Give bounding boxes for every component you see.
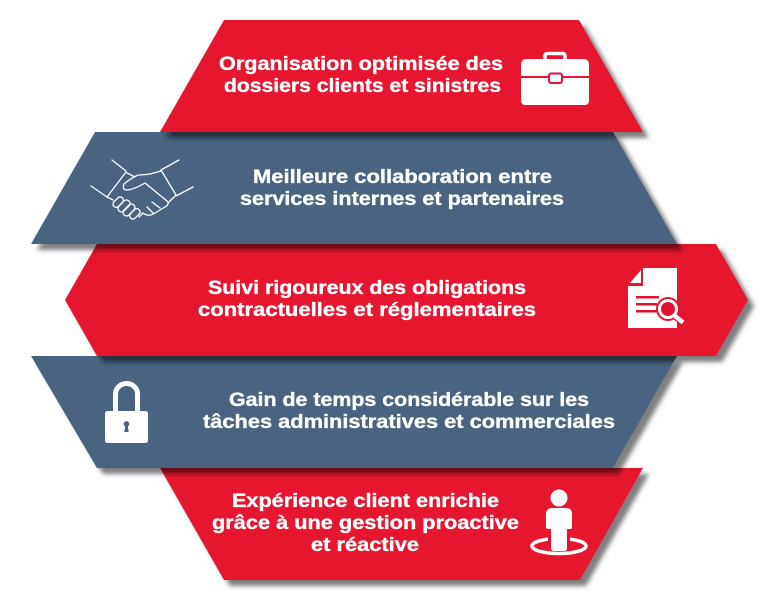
- text: organisation optimisée: Organisation optimisée des: [219, 54, 503, 75]
- text: suivi rigoureux: Suivi rigoureux des obligations: [208, 278, 526, 299]
- text: expérience client: [212, 491, 519, 556]
- text: suivi rigoureux: [198, 278, 536, 321]
- text: meilleure collaboration: [240, 167, 564, 210]
- panel: organisation optimisée: [160, 20, 643, 132]
- icon: person on ring: [532, 490, 586, 554]
- text: gain de temps: Gain de temps considérable sur les: [229, 390, 589, 411]
- text: expérience client: et réactive: [311, 535, 419, 556]
- text: expérience client: grâce à une gestion proactive: [212, 513, 519, 534]
- text: meilleure collaboration: services internes et partenaires: [240, 189, 564, 210]
- panel: suivi rigoureux: [65, 244, 748, 356]
- text: expérience client: Expérience client enrichie: [232, 491, 499, 512]
- panel: expérience client: [160, 468, 643, 580]
- text: suivi rigoureux: contractuelles et réglementaires: [198, 300, 536, 321]
- icon: handshake: [91, 160, 193, 220]
- text: organisation optimisée: dossiers clients et sinistres: [224, 76, 501, 97]
- panel: meilleure collaboration: [31, 132, 677, 244]
- text: gain de temps: [203, 390, 615, 433]
- icon: briefcase: [521, 54, 589, 105]
- text: gain de temps: tâches administratives et commerciales: [203, 412, 615, 433]
- text: meilleure collaboration: Meilleure collaboration entre: [253, 167, 552, 188]
- icon: document with magnifier: [628, 268, 684, 328]
- panel: gain de temps: [31, 356, 677, 468]
- icon: padlock: [105, 384, 148, 443]
- text: organisation optimisée: [219, 54, 503, 97]
